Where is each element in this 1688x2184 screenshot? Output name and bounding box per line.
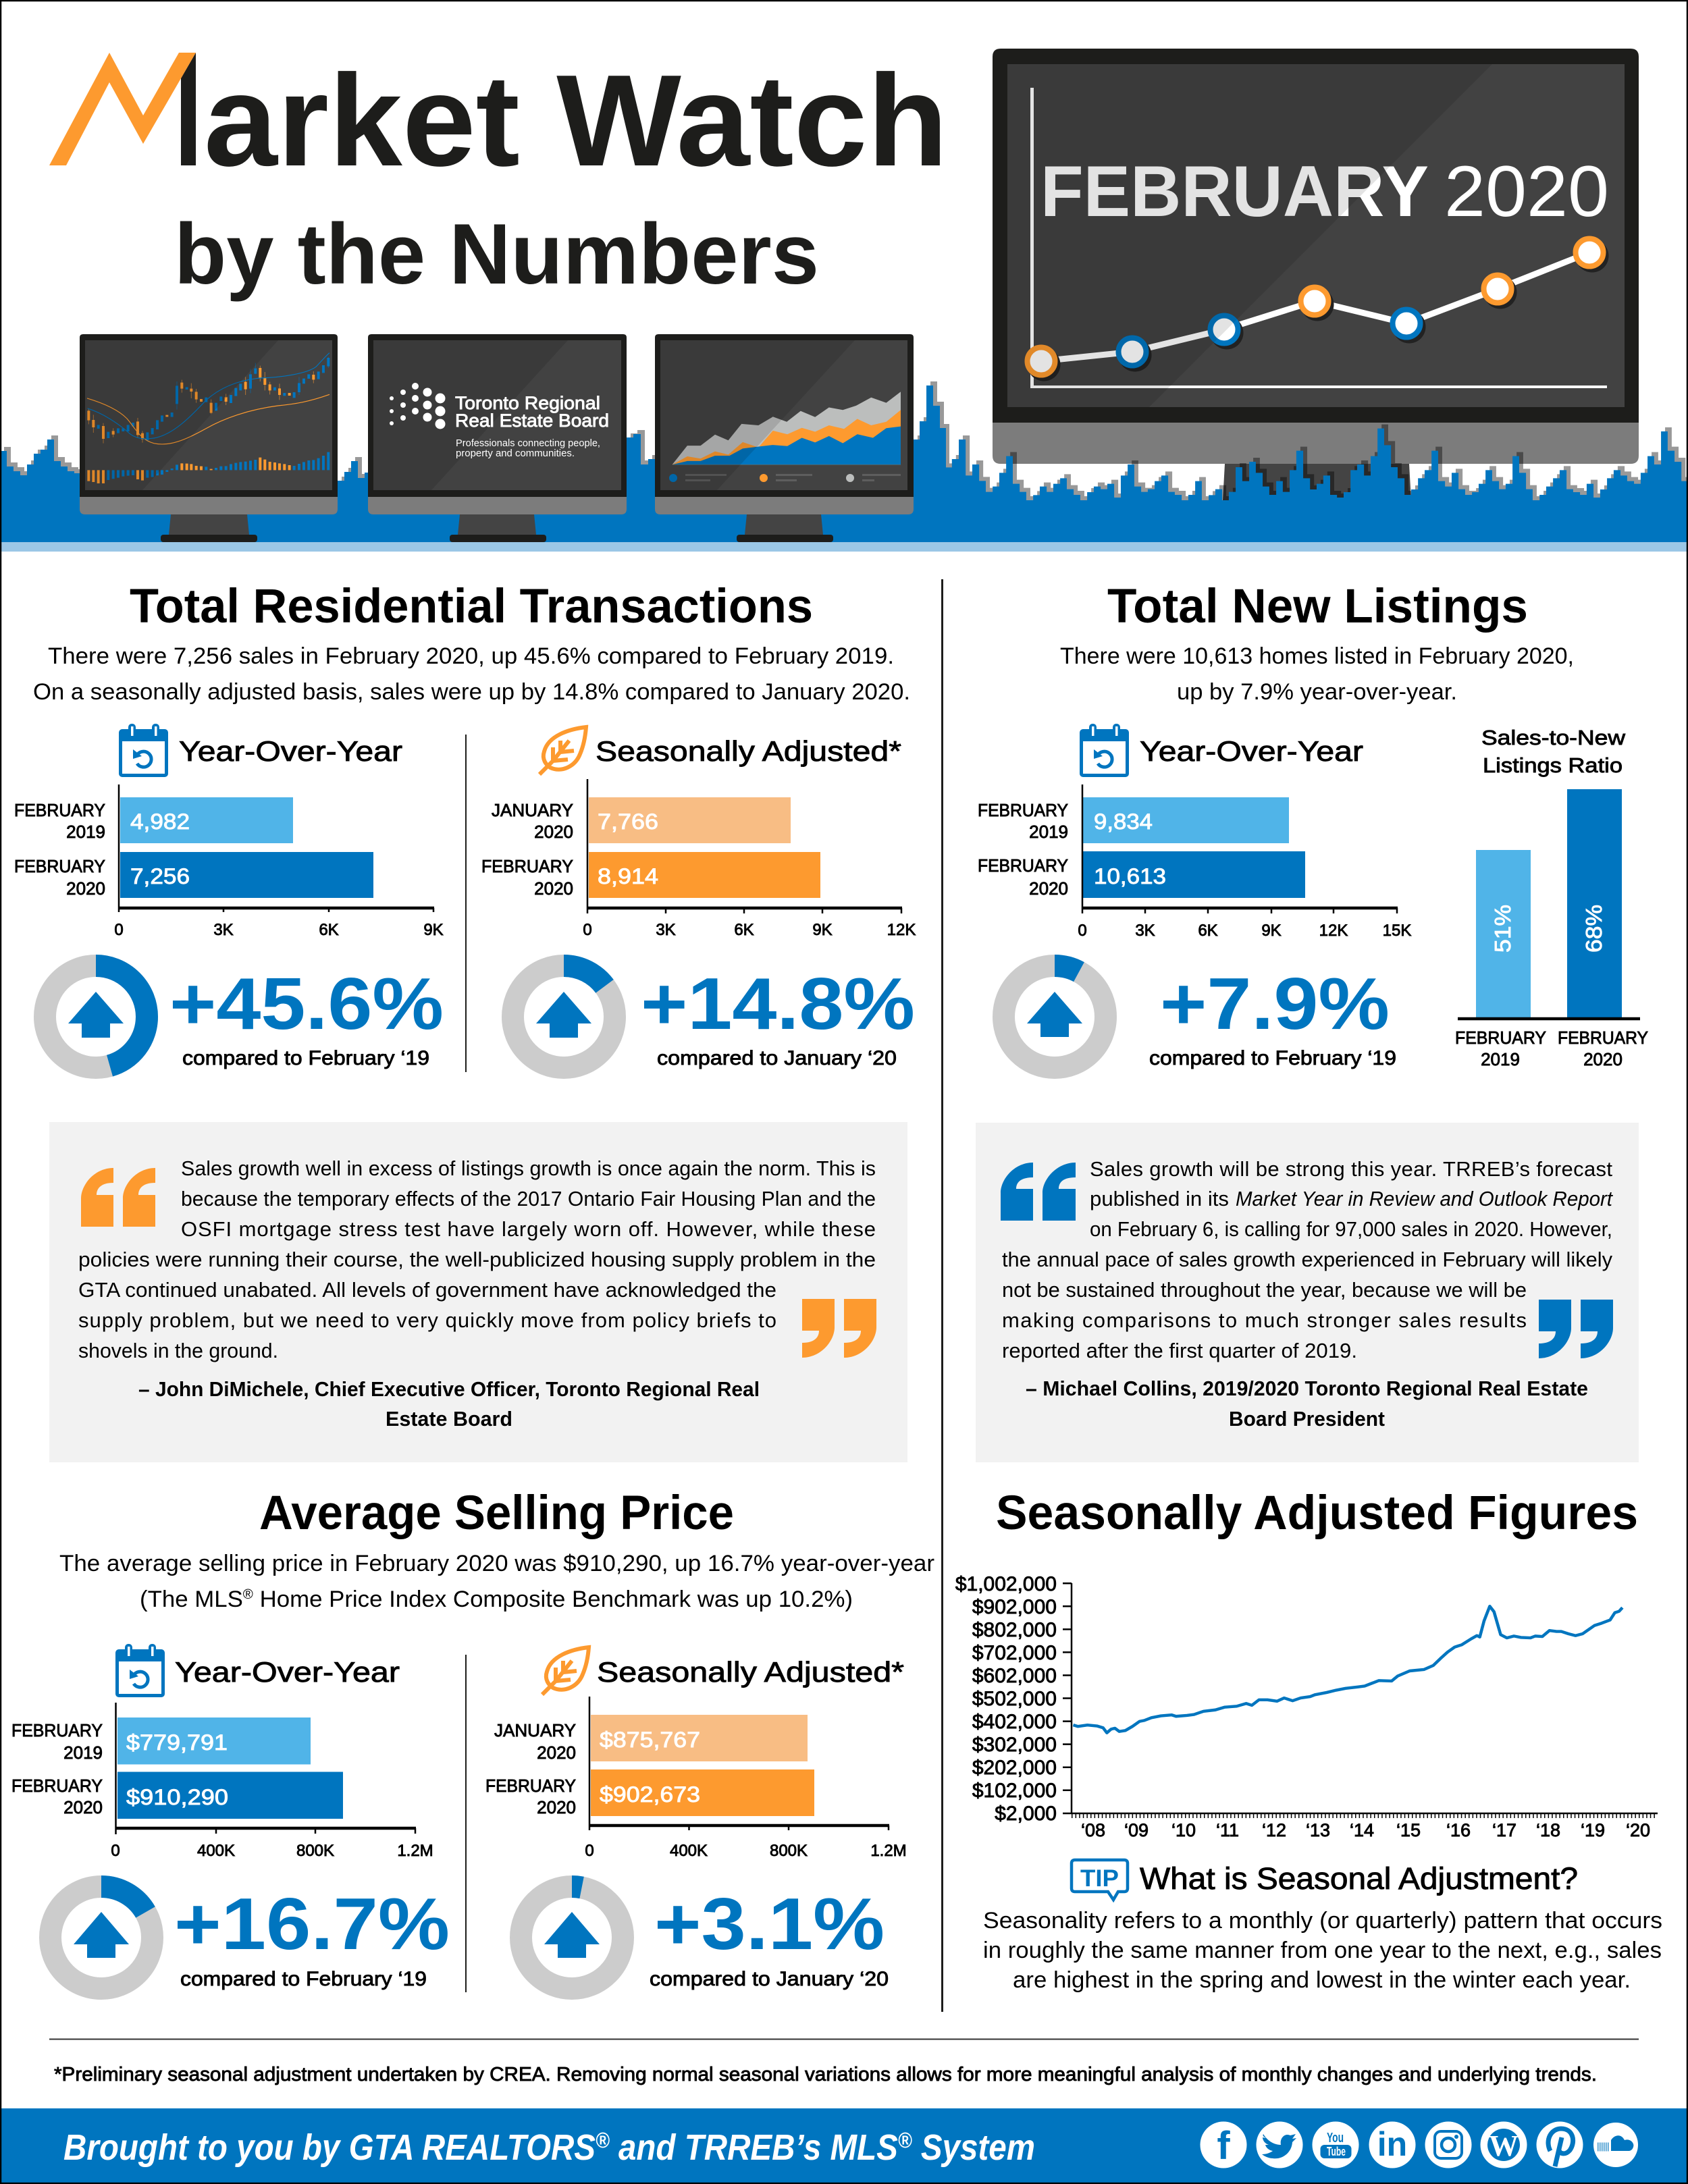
bar chart: seasonally adjusted sales: 3K bbox=[656, 921, 676, 939]
bar chart: seasonally adjusted price: 400K bbox=[670, 1842, 708, 1860]
chart: sales-to-new listings ratio: FEBRUARY bbox=[1558, 1028, 1648, 1048]
chart: sales-to-new listings ratio: FEBRUARY bbox=[1455, 1028, 1546, 1048]
summary text: On a seasonally adjusted basis, sales were up by 14.8% compared to January 2020. bbox=[33, 679, 910, 705]
heading: Average Selling Price bbox=[259, 1487, 734, 1540]
logo dots bbox=[390, 383, 446, 429]
quote text: published in its bbox=[1090, 1187, 1229, 1210]
quote text: reported after the first quarter of 2019. bbox=[1002, 1339, 1357, 1362]
icon: closing quote bbox=[1539, 1300, 1613, 1358]
big number: +45.6%: +45.6% bbox=[169, 963, 444, 1045]
bar chart: seasonally adjusted sales: 9K bbox=[812, 921, 833, 939]
subheading: year-over-year: Year-Over-Year bbox=[1140, 735, 1363, 767]
icon: youtube: Tube bbox=[1327, 2145, 1346, 2158]
chart: sales-to-new listings ratio: Listings Ratio bbox=[1483, 753, 1623, 777]
line chart: seasonally adjusted prices: ‘13 bbox=[1306, 1820, 1330, 1840]
quote text: Market Year in Review and Outlook Report bbox=[1236, 1187, 1613, 1210]
line chart: seasonally adjusted prices: ‘09 bbox=[1124, 1820, 1149, 1840]
icon: youtube: You bbox=[1327, 2131, 1344, 2146]
bar chart: year-over-year price: FEBRUARY bbox=[11, 1776, 103, 1796]
attribution: Estate Board bbox=[386, 1407, 512, 1431]
skyline band bbox=[0, 381, 1688, 552]
bar chart: seasonally adjusted sales bbox=[481, 779, 916, 939]
quote text: GTA continued unabated. All levels of government have acknowledged the bbox=[78, 1278, 776, 1302]
bar chart: new listings: 15K bbox=[1383, 922, 1411, 940]
bar chart: year-over-year sales: 9K bbox=[423, 921, 444, 939]
title: arket Watch: arket Watch bbox=[204, 47, 948, 193]
bar chart: seasonally adjusted sales: 8,914 bbox=[598, 864, 658, 888]
quote text: making comparisons to much stronger sales results bbox=[1002, 1308, 1527, 1332]
subheading: seasonally adjusted: Seasonally Adjusted* bbox=[596, 735, 901, 767]
line chart: seasonally adjusted prices: $902,000 bbox=[972, 1596, 1057, 1618]
attribution bbox=[138, 1377, 760, 1431]
line chart: seasonally adjusted prices: ‘11 bbox=[1216, 1820, 1239, 1840]
bar chart: year-over-year price: 2019 bbox=[63, 1742, 103, 1763]
panel: seasonally adjusted figures bbox=[955, 1487, 1662, 1993]
explanation text: are highest in the spring and lowest in the winter each year. bbox=[1013, 1967, 1631, 1993]
bar chart: new listings: 0 bbox=[1078, 922, 1087, 940]
icon: facebook bbox=[1201, 2121, 1246, 2168]
footer band bbox=[0, 2108, 1688, 2184]
bar chart: year-over-year price: 2020 bbox=[63, 1797, 103, 1817]
quote text: supply problem, but we need to very quickly move from policy briefs to bbox=[78, 1308, 776, 1332]
explanation text bbox=[983, 1908, 1662, 1993]
subheading: seasonally adjusted: Seasonally Adjusted* bbox=[597, 1656, 904, 1688]
bar chart: year-over-year price bbox=[11, 1703, 433, 1860]
stacked area plot bbox=[672, 392, 901, 464]
footer text: ® bbox=[596, 2128, 610, 2152]
logo wordmark: Toronto Regional bbox=[455, 393, 600, 413]
icon: opening quote bbox=[1001, 1163, 1076, 1221]
chart: sales-to-new listings ratio: 68% bbox=[1581, 905, 1606, 953]
heading: Total New Listings bbox=[1107, 580, 1528, 633]
quote text: OSFI mortgage stress test have largely worn off. However, while these bbox=[181, 1217, 876, 1241]
bar chart: year-over-year sales bbox=[14, 784, 444, 939]
bar chart: year-over-year price: 400K bbox=[197, 1842, 235, 1860]
bar chart: year-over-year sales: 0 bbox=[114, 921, 124, 939]
line chart: seasonally adjusted prices: ‘18 bbox=[1536, 1820, 1560, 1840]
summary text: Home Price Index Composite Benchmark was up 10.2%) bbox=[253, 1587, 853, 1612]
line chart: seasonally adjusted prices: ‘17 bbox=[1492, 1820, 1516, 1840]
icon: linkedin bbox=[1369, 2121, 1415, 2168]
line chart: seasonally adjusted prices: ‘08 bbox=[1081, 1820, 1105, 1840]
bar chart: seasonally adjusted price: JANUARY bbox=[494, 1720, 576, 1740]
bar chart: new listings bbox=[978, 784, 1411, 940]
footer text: ® bbox=[898, 2128, 912, 2152]
panel: total residential transactions bbox=[14, 580, 916, 1072]
icon: calendar bbox=[1080, 724, 1129, 777]
line chart: seasonally adjusted prices: ‘16 bbox=[1446, 1820, 1471, 1840]
bar chart: new listings: 2019 bbox=[1029, 822, 1068, 842]
bar chart: new listings: 6K bbox=[1198, 922, 1218, 940]
line chart: seasonally adjusted prices: $2,000 bbox=[995, 1803, 1057, 1825]
bar chart: new listings: 3K bbox=[1135, 922, 1155, 940]
donut: 7.9% bbox=[1003, 965, 1106, 1068]
icon: tip bubble bbox=[1072, 1860, 1128, 1900]
line chart: seasonally adjusted prices bbox=[955, 1573, 1658, 1840]
header: title logotype bbox=[49, 47, 948, 302]
candlestick plot bbox=[87, 353, 329, 483]
bar chart: new listings: 12K bbox=[1319, 922, 1348, 940]
donut: 16.7% bbox=[50, 1886, 153, 1989]
explanation text: Seasonality refers to a monthly (or quarterly) pattern that occurs bbox=[983, 1908, 1662, 1934]
summary text bbox=[1060, 643, 1574, 705]
quote text: the annual pace of sales growth experienced in February will likely bbox=[1002, 1248, 1612, 1271]
bar chart: seasonally adjusted price bbox=[485, 1697, 907, 1860]
line chart: seasonally adjusted prices: $702,000 bbox=[972, 1642, 1057, 1664]
bar chart: year-over-year sales: 2020 bbox=[66, 878, 105, 899]
bar chart: seasonally adjusted price: 0 bbox=[585, 1842, 594, 1860]
text: FEBRUARY: FEBRUARY bbox=[1040, 151, 1429, 232]
caption: compared to February ‘19 bbox=[182, 1047, 429, 1069]
icon: calendar bbox=[119, 724, 168, 777]
bar chart: year-over-year sales: FEBRUARY bbox=[14, 856, 105, 876]
summary text: (The MLS bbox=[140, 1587, 240, 1612]
big number: +7.9%: +7.9% bbox=[1160, 963, 1390, 1045]
subheading: year-over-year: Year-Over-Year bbox=[179, 735, 402, 767]
quote text: on February 6, is calling for 97,000 sales in 2020. However, bbox=[1090, 1217, 1612, 1241]
bar chart: seasonally adjusted sales: 12K bbox=[887, 921, 916, 939]
line chart: seasonally adjusted prices: $1,002,000 bbox=[955, 1573, 1057, 1595]
donut: 14.8% bbox=[513, 965, 614, 1068]
panel: quote Michael Collins bbox=[976, 1123, 1639, 1462]
summary text: ® bbox=[243, 1587, 253, 1602]
bar chart: year-over-year price: $779,791 bbox=[126, 1730, 228, 1755]
bar chart: year-over-year price: 0 bbox=[111, 1842, 120, 1860]
line chart: seasonally adjusted prices: ‘14 bbox=[1350, 1820, 1374, 1840]
panel: total new listings bbox=[978, 580, 1648, 1069]
chart: sales-to-new listings ratio: 51% bbox=[1490, 905, 1515, 953]
bar chart: seasonally adjusted price: 1.2M bbox=[870, 1842, 907, 1860]
big number: +14.8%: +14.8% bbox=[641, 963, 915, 1045]
bar chart: seasonally adjusted sales: 7,766 bbox=[598, 809, 658, 834]
chart: sales-to-new listings ratio: 2020 bbox=[1583, 1049, 1623, 1069]
icon: facebook: f bbox=[1217, 2124, 1230, 2168]
attribution bbox=[1026, 1377, 1588, 1431]
line chart: seasonally adjusted prices: ‘10 bbox=[1171, 1820, 1196, 1840]
summary text: The average selling price in February 2020 was $910,290, up 16.7% year-over-year bbox=[59, 1551, 934, 1576]
quote text: because the temporary effects of the 2017 Ontario Fair Housing Plan and the bbox=[181, 1187, 876, 1210]
heading: Seasonally Adjusted Figures bbox=[996, 1487, 1638, 1540]
icon: pinterest bbox=[1537, 2121, 1583, 2168]
footnote: *Preliminary seasonal adjustment undertaken by CREA. Removing normal seasonal variations allows for more meaningful analysis of monthly changes and underlying trends. bbox=[54, 2064, 1597, 2085]
icon: calendar bbox=[115, 1644, 165, 1697]
explanation text: in roughly the same manner from one year to the next, e.g., sales bbox=[983, 1938, 1662, 1963]
bar chart: year-over-year price: $910,290 bbox=[126, 1785, 228, 1809]
title: by the Numbers: by the Numbers bbox=[174, 206, 819, 302]
line chart: seasonally adjusted prices: ‘19 bbox=[1581, 1820, 1605, 1840]
text: 2020: 2020 bbox=[1444, 151, 1609, 232]
quote text bbox=[1002, 1157, 1613, 1362]
big number: +3.1%: +3.1% bbox=[654, 1883, 885, 1965]
bar chart: new listings: 9,834 bbox=[1094, 809, 1153, 834]
attribution: – Michael Collins, 2019/2020 Toronto Regional Real Estate bbox=[1026, 1377, 1588, 1400]
quote text: not be sustained throughout the year, because we will be bbox=[1002, 1278, 1527, 1302]
caption: compared to January ‘20 bbox=[650, 1968, 889, 1990]
bar chart: seasonally adjusted price: $902,673 bbox=[600, 1782, 700, 1807]
line chart: seasonally adjusted prices: ‘20 bbox=[1626, 1820, 1650, 1840]
caption: compared to January ‘20 bbox=[657, 1047, 897, 1069]
summary text bbox=[33, 643, 910, 705]
bar chart: seasonally adjusted sales: FEBRUARY bbox=[481, 856, 573, 876]
logo wordmark line 2: Real Estate Board bbox=[455, 410, 609, 431]
bar chart: seasonally adjusted sales: 0 bbox=[583, 921, 592, 939]
chart: sales-to-new listings ratio bbox=[1455, 726, 1648, 1069]
icon: opening quote bbox=[81, 1168, 155, 1227]
icon: soundcloud bbox=[1593, 2123, 1638, 2167]
bar chart: year-over-year sales: 4,982 bbox=[130, 809, 190, 834]
icon: instagram bbox=[1425, 2121, 1472, 2168]
bar chart: seasonally adjusted price: 800K bbox=[770, 1842, 808, 1860]
big number: +16.7%: +16.7% bbox=[174, 1883, 450, 1965]
quote text: shovels in the ground. bbox=[78, 1339, 278, 1362]
logo tagline: Professionals connecting people, bbox=[456, 437, 600, 449]
bar chart: year-over-year price: 800K bbox=[296, 1842, 334, 1860]
donut: 45.6% bbox=[45, 965, 147, 1068]
quote text: Sales growth well in excess of listings growth is once again the norm. This is bbox=[181, 1156, 876, 1180]
chart legend bbox=[669, 474, 901, 482]
summary text bbox=[59, 1551, 934, 1612]
caption: compared to February ‘19 bbox=[180, 1968, 427, 1990]
quote text: Sales growth will be strong this year. TRREB’s forecast bbox=[1090, 1157, 1612, 1181]
attribution: – John DiMichele, Chief Executive Officer, Toronto Regional Real bbox=[138, 1377, 760, 1401]
bar chart: new listings: FEBRUARY bbox=[978, 855, 1068, 876]
icon: wordpress bbox=[1480, 2121, 1527, 2168]
line chart: seasonally adjusted prices: ‘12 bbox=[1262, 1820, 1286, 1840]
column divider bbox=[941, 579, 943, 2012]
bar chart: seasonally adjusted price: FEBRUARY bbox=[485, 1776, 576, 1796]
summary text: up by 7.9% year-over-year. bbox=[1177, 679, 1457, 705]
icon: twitter bbox=[1256, 2121, 1303, 2168]
bar chart: seasonally adjusted sales: 2020 bbox=[534, 878, 573, 899]
donut: 3.1% bbox=[521, 1886, 623, 1989]
panel: average selling price bbox=[11, 1487, 934, 1992]
quote text: policies were running their course, the well-publicized housing supply problem in the bbox=[78, 1248, 876, 1271]
footer text: Brought to you by GTA REALTORS bbox=[63, 2127, 668, 2168]
bar chart: year-over-year sales: 6K bbox=[319, 921, 339, 939]
caption: compared to February ‘19 bbox=[1149, 1047, 1396, 1069]
bar chart: new listings: FEBRUARY bbox=[978, 800, 1068, 820]
bar chart: seasonally adjusted sales: 2020 bbox=[534, 822, 573, 842]
summary text: There were 7,256 sales in February 2020, up 45.6% compared to February 2019. bbox=[48, 643, 894, 669]
icon: leaf bbox=[539, 727, 586, 774]
line chart: seasonally adjusted prices: $802,000 bbox=[972, 1619, 1057, 1641]
icon: tip bubble: TIP bbox=[1080, 1865, 1119, 1892]
footer text: and TRREB’s MLS bbox=[610, 2127, 898, 2168]
summary text: There were 10,613 homes listed in February 2020, bbox=[1060, 643, 1574, 669]
panel: quote John DiMichele bbox=[49, 1122, 907, 1462]
line chart: seasonally adjusted prices: ‘15 bbox=[1396, 1820, 1421, 1840]
logo tagline line 2: property and communities. bbox=[456, 448, 575, 459]
bar chart: seasonally adjusted price: 2020 bbox=[537, 1742, 576, 1763]
line chart: seasonally adjusted prices: $202,000 bbox=[972, 1757, 1057, 1779]
icon: leaf bbox=[542, 1647, 589, 1695]
icon: youtube bbox=[1313, 2121, 1359, 2168]
bar chart: year-over-year sales: 7,256 bbox=[130, 864, 190, 888]
icon: orange M zigzag bbox=[49, 53, 196, 165]
subheading: what is seasonal adjustment: What is Seasonal Adjustment? bbox=[1140, 1861, 1578, 1896]
line chart: seasonally adjusted prices: $602,000 bbox=[972, 1665, 1057, 1687]
bar chart: year-over-year sales: 3K bbox=[213, 921, 234, 939]
subheading: year-over-year: Year-Over-Year bbox=[175, 1656, 400, 1688]
attribution: Board President bbox=[1229, 1407, 1385, 1431]
bar chart: year-over-year sales: 2019 bbox=[66, 822, 105, 842]
icon: linkedin: in bbox=[1377, 2125, 1407, 2163]
line chart: seasonally adjusted prices: $302,000 bbox=[972, 1734, 1057, 1756]
footer text: System bbox=[912, 2127, 1035, 2168]
bar chart: year-over-year price: 1.2M bbox=[397, 1842, 433, 1860]
icon: closing quote bbox=[802, 1299, 876, 1358]
heading: Total Residential Transactions bbox=[130, 580, 813, 633]
bar chart: year-over-year price: FEBRUARY bbox=[11, 1720, 103, 1740]
line chart: seasonally adjusted prices: $502,000 bbox=[972, 1688, 1057, 1710]
bar chart: seasonally adjusted price: $875,767 bbox=[600, 1728, 700, 1752]
chart: sales-to-new listings ratio: 2019 bbox=[1481, 1049, 1520, 1069]
line chart on screen bbox=[1028, 239, 1608, 381]
bar chart: new listings: 2020 bbox=[1029, 878, 1068, 899]
bar chart: new listings: 9K bbox=[1261, 922, 1282, 940]
bar chart: seasonally adjusted sales: JANUARY bbox=[492, 800, 573, 820]
bar chart: seasonally adjusted price: 2020 bbox=[537, 1797, 576, 1817]
bar chart: new listings: 10,613 bbox=[1094, 864, 1166, 888]
big monitor: February 2020 bbox=[993, 49, 1639, 513]
small monitor: area chart bbox=[655, 334, 914, 542]
line chart: seasonally adjusted prices: $102,000 bbox=[972, 1780, 1057, 1802]
bar chart: seasonally adjusted sales: 6K bbox=[734, 921, 754, 939]
chart: sales-to-new listings ratio: Sales-to-New bbox=[1481, 726, 1626, 749]
small monitor: TRREB logo bbox=[368, 334, 627, 542]
bar chart: year-over-year sales: FEBRUARY bbox=[14, 800, 105, 820]
icon: wordpress: W bbox=[1489, 2129, 1519, 2162]
line chart: seasonally adjusted prices: $402,000 bbox=[972, 1711, 1057, 1733]
small monitor: candlestick chart bbox=[80, 334, 338, 542]
quote text bbox=[78, 1156, 876, 1362]
